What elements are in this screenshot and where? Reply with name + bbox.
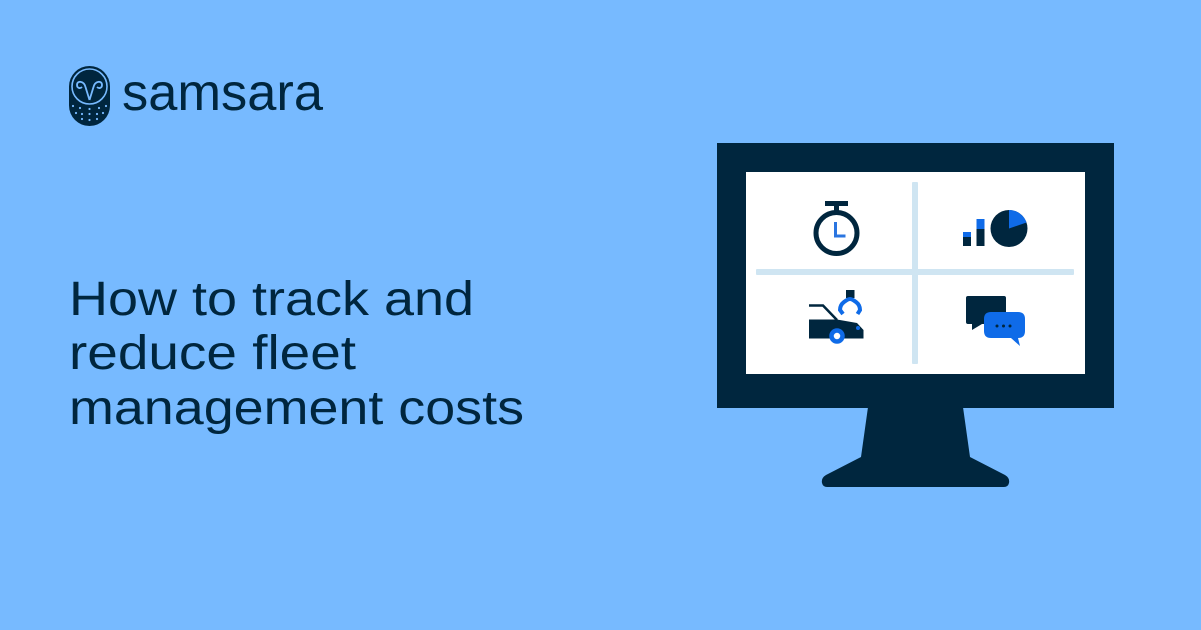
title bbox=[69, 273, 524, 435]
monitor frame bbox=[717, 143, 1114, 408]
logo wordmark: samsara bbox=[122, 64, 323, 122]
title: How to track and bbox=[69, 273, 474, 326]
screen dividers bbox=[756, 182, 1074, 364]
monitor stand bbox=[822, 400, 1009, 487]
monitor illustration bbox=[717, 143, 1114, 487]
title: management costs bbox=[69, 382, 524, 435]
icon: car repair with claw bbox=[809, 290, 864, 342]
icon: chat bubbles bbox=[966, 296, 1025, 346]
logo: samsara bbox=[69, 64, 323, 126]
icon: owl bbox=[69, 66, 110, 126]
icon: bars and pie chart bbox=[963, 210, 1028, 247]
icon: stopwatch bbox=[816, 201, 857, 254]
title: reduce fleet bbox=[69, 327, 356, 380]
monitor screen bbox=[746, 172, 1085, 374]
